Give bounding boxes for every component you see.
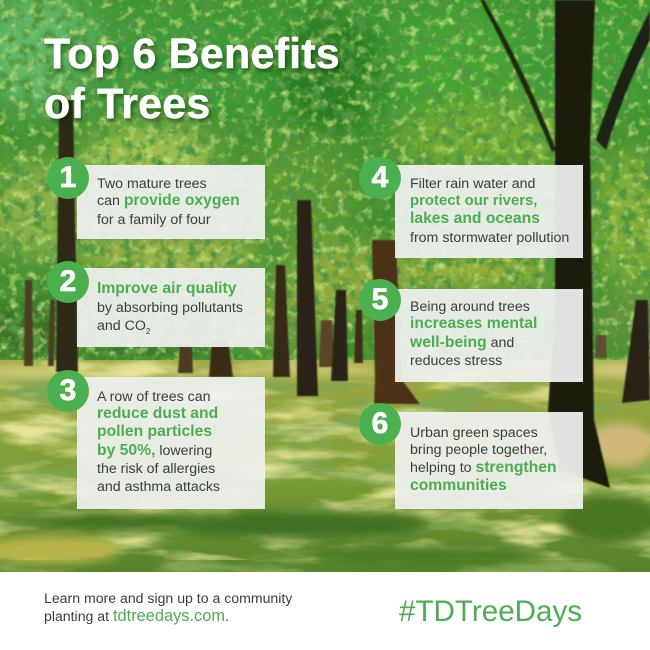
number badge 4 xyxy=(359,157,401,199)
panel: benefit 5: Being around trees xyxy=(410,299,530,315)
number badge 5 xyxy=(359,279,401,321)
panel: benefit 1: can provide oxygen xyxy=(97,192,240,209)
panel: benefit 5: well-being and xyxy=(410,334,514,351)
panel: benefit 5: reduces stress xyxy=(410,353,502,369)
panel: benefit 6: bring people together, xyxy=(410,442,547,458)
footer call to action: planting at tdtreedays.com. xyxy=(44,607,229,625)
panel: benefit 1 xyxy=(77,165,265,239)
number badge 3 xyxy=(47,370,89,412)
number badge 6: 6 xyxy=(372,407,388,440)
panel: benefit 4: protect our rivers, xyxy=(410,193,537,209)
panel: benefit 6: Urban green spaces xyxy=(410,425,538,441)
panel: benefit 2: Improve air quality xyxy=(97,280,236,297)
panel: benefit 1: for a family of four xyxy=(97,212,211,228)
hashtag: #TDTreeDays xyxy=(399,595,582,628)
number badge 2 xyxy=(47,261,89,303)
panel: benefit 2: and CO2 xyxy=(97,318,150,336)
panel: benefit 6: communities xyxy=(410,477,507,494)
number badge 3: 3 xyxy=(60,374,76,407)
panel: benefit 2 xyxy=(77,268,265,347)
panel: benefit 1: Two mature trees xyxy=(97,176,207,192)
panel: benefit 6 xyxy=(395,412,583,509)
tree trunks xyxy=(24,0,650,488)
footer call to action xyxy=(44,590,292,625)
panel: benefit 3: A row of trees can xyxy=(97,389,211,405)
panel: benefit 4 xyxy=(395,165,583,258)
foliage texture xyxy=(0,0,650,362)
panel: benefit 3: by 50%, lowering xyxy=(97,442,212,459)
lawn xyxy=(0,360,650,572)
panel: benefit 3: reduce dust and xyxy=(97,405,218,422)
number badge 2: 2 xyxy=(60,265,76,298)
panel: benefit 6: helping to strengthen xyxy=(410,459,557,476)
panel: benefit 5: increases mental xyxy=(410,315,537,332)
number badge 5: 5 xyxy=(372,283,388,316)
footer band xyxy=(0,572,650,650)
panel: benefit 2: by absorbing pollutants xyxy=(97,300,243,316)
number badge 1 xyxy=(47,157,89,199)
title: of Trees xyxy=(44,80,211,128)
panel: benefit 3 xyxy=(77,377,265,509)
number badge 1: 1 xyxy=(60,161,76,194)
panel: benefit 4: Filter rain water and xyxy=(410,176,535,192)
panel: benefit 5 xyxy=(395,289,583,382)
panel: benefit 3: pollen particles xyxy=(97,423,212,440)
footer call to action: Learn more and sign up to a community xyxy=(44,590,292,606)
panel: benefit 3: and asthma attacks xyxy=(97,479,220,495)
title xyxy=(44,30,342,128)
panel: benefit 3: the risk of allergies xyxy=(97,461,215,477)
panel: benefit 4: lakes and oceans xyxy=(410,210,540,227)
number badge 6 xyxy=(359,403,401,445)
title: Top 6 Benefits xyxy=(44,30,340,78)
panel: benefit 4: from stormwater pollution xyxy=(410,230,569,246)
number badge 4: 4 xyxy=(372,161,388,194)
